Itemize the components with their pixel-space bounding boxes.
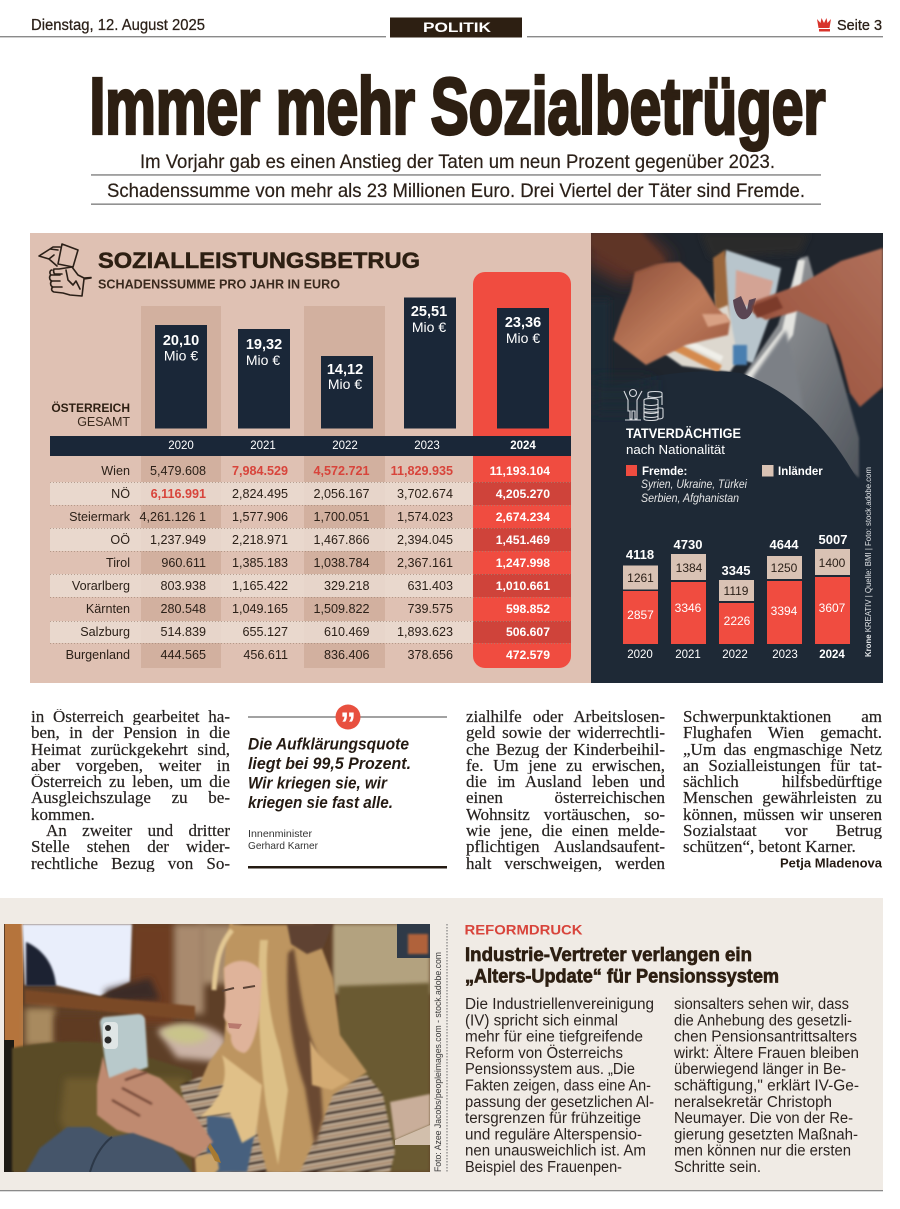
- quote attribution: Innenminister: [248, 828, 313, 840]
- stacked bar 2022: 3345: [722, 563, 750, 578]
- stacked bar 2023: [767, 537, 802, 661]
- article text column 1: Reform von Österreichs: [465, 1044, 623, 1062]
- stacked bar 2020: 2020: [627, 649, 653, 661]
- overalls: [207, 1115, 257, 1172]
- table row: Salzburg: 1,893.623: [397, 625, 453, 639]
- subheading: [91, 151, 821, 205]
- section label: [390, 18, 522, 38]
- table row: NÖ: [111, 487, 550, 501]
- table header: [50, 436, 571, 456]
- bar 2024: [497, 308, 549, 428]
- stacked bar 2023: 2023: [772, 649, 798, 661]
- table row: Burgenland: 836.406: [324, 648, 370, 662]
- icon: hand with money: [39, 244, 91, 296]
- table row: OÖ: 1,237.949: [150, 533, 206, 547]
- table row: Kärnten: [86, 602, 550, 616]
- article text column 1: Fakten zeigen, dass eine An-: [465, 1078, 651, 1094]
- article text column 2: [466, 709, 665, 872]
- bar 2021: Mio €: [246, 352, 280, 368]
- subheading: Im Vorjahr gab es einen Anstieg der Taten um neun Prozent gegenüber 2023.: [140, 151, 775, 173]
- bar 2022: [321, 356, 373, 428]
- page number: Seite 3: [837, 18, 882, 34]
- table row: Kärnten: 1,509.822: [313, 602, 370, 616]
- table row: Vorarlberg: Vorarlberg: [72, 579, 130, 593]
- table row: Tirol: [106, 556, 550, 570]
- stacked bar 2021: 3346: [675, 601, 702, 615]
- phone: [100, 1014, 148, 1084]
- stacked bar 2023: 4644: [770, 537, 799, 552]
- icon: quote mark: [336, 704, 360, 742]
- table row: Steiermark: 2,674.234: [496, 510, 550, 524]
- striped shirt: [180, 1075, 395, 1172]
- quote attribution: Gerhard Karner: [248, 840, 318, 852]
- quote text: liegt bei 99,5 Prozent.: [248, 755, 411, 773]
- stacked bar 2024: 2024: [819, 649, 845, 661]
- byline: Petja Mladenova: [780, 856, 883, 870]
- hands: [97, 1056, 213, 1158]
- table header: 2021: [250, 440, 276, 452]
- table header: 2022: [332, 440, 358, 452]
- bar 2020: [155, 325, 207, 428]
- stacked bar 2024: 1400: [819, 556, 846, 570]
- article text column 2: wirkt: Ältere Frauen bleiben: [673, 1045, 859, 1062]
- knees jeans: [25, 1127, 193, 1174]
- stacked bar 2023: 3394: [771, 604, 798, 618]
- table row: OÖ: [110, 533, 550, 547]
- stacked bar 2021: 1384: [676, 561, 703, 575]
- stacked bar 2020: 4118: [626, 547, 654, 562]
- table row: NÖ: 6,116.991: [151, 487, 206, 501]
- article headline: [465, 944, 779, 988]
- table row: NÖ: 3,702.674: [397, 487, 453, 501]
- table row: Wien: 7,984.529: [232, 464, 288, 478]
- left hand: [613, 262, 730, 365]
- legend: Inländer: [778, 466, 823, 478]
- table row: Wien: 5,479.608: [150, 464, 206, 478]
- article text column 1: und reguläre Alterspensio-: [465, 1126, 642, 1143]
- subheading: Schadenssumme von mehr als 23 Millionen Euro. Drei Viertel der Täter sind Fremde.: [107, 180, 805, 202]
- stacked bar 2021: 4730: [674, 537, 702, 552]
- table row: Steiermark: 1,577.906: [232, 510, 288, 524]
- table row: Kärnten: 739.575: [407, 602, 453, 616]
- dark curved overlay: [656, 371, 855, 476]
- article text column 2: die Anhebung des gesetzli-: [674, 1012, 852, 1029]
- row label heading: ÖSTERREICH: [51, 400, 130, 415]
- quote text: Wir kriegen sie, wir: [248, 774, 388, 792]
- bar 2021: [238, 329, 290, 428]
- table row: Kärnten: 598.852: [506, 602, 550, 616]
- bar 2020: 20,10: [163, 333, 199, 349]
- stacked bar 2020: [623, 547, 658, 661]
- quote attribution: [248, 828, 318, 852]
- hair: [197, 917, 367, 1172]
- article text column 3: [683, 709, 882, 856]
- bar 2023: 25,51: [411, 304, 447, 320]
- table row: Burgenland: 378.656: [407, 648, 453, 662]
- table row: Kärnten: 280.548: [160, 602, 206, 616]
- stacked bar 2024: 5007: [819, 532, 847, 547]
- table row: NÖ: 2,824.495: [232, 487, 288, 501]
- table row: Vorarlberg: 803.938: [160, 579, 206, 593]
- page header: [0, 17, 883, 38]
- bar 2023: Mio €: [412, 319, 446, 335]
- table row: Wien: 11,829.935: [391, 464, 453, 478]
- chart heading: SOZIALLEISTUNGSBETRUG: [98, 248, 420, 273]
- table header: 2020: [168, 440, 194, 452]
- table row: Salzburg: Salzburg: [80, 625, 130, 639]
- table row: Steiermark: [69, 510, 550, 524]
- article text column 2: neralsekretär Christoph: [674, 1094, 832, 1111]
- table row: Tirol: 1,385.183: [232, 556, 288, 570]
- table header: 2023: [414, 440, 440, 452]
- article text column 1: (IV) spricht sich einmal: [465, 1012, 618, 1029]
- column highlight 2022: [304, 306, 385, 668]
- table row: Salzburg: 514.839: [160, 625, 206, 639]
- article text column 2: schäftigung," erklärt IV-Ge-: [674, 1078, 859, 1094]
- table row: Vorarlberg: 329.218: [324, 579, 370, 593]
- quote text: Die Aufklärungsquote: [248, 736, 409, 754]
- icon: quote mark: ”: [340, 706, 356, 742]
- table row: Salzburg: 506.607: [506, 625, 550, 639]
- article text column 2: Schritte sein.: [674, 1159, 761, 1176]
- table row: Tirol: 1,247.998: [496, 556, 550, 570]
- table row: OÖ: 2,394.045: [397, 533, 453, 547]
- table row: NÖ: NÖ: [111, 487, 130, 501]
- pull quote: [248, 704, 447, 868]
- banknotes: [715, 250, 781, 363]
- table row: OÖ: OÖ: [110, 533, 130, 547]
- table row: Burgenland: 444.565: [160, 648, 206, 662]
- table row: Steiermark: 1,700.051: [313, 510, 370, 524]
- photo: woman looking at phone: [4, 917, 430, 1174]
- stacked bar 2022: 2022: [722, 649, 748, 661]
- row label heading: [51, 400, 130, 429]
- photo credit: Foto: Azee Jacobs/peopleimages.com - stock.adobe.com: [433, 952, 444, 1172]
- table row: OÖ: 2,218.971: [232, 533, 288, 547]
- table row: Steiermark: 4,261.126 1: [139, 510, 206, 524]
- table row: Burgenland: 456.611: [243, 648, 288, 662]
- column highlight 2020: [141, 306, 221, 668]
- article text column 1: tersgrenzen für frühzeitige: [465, 1110, 641, 1127]
- bar 2021: 19,32: [246, 337, 282, 353]
- article headline: „Alters-Update“ für Pensionssystem: [465, 966, 779, 988]
- panel: Sozialleistungsbetrug table and bars: [30, 233, 591, 683]
- table row: Salzburg: 655.127: [242, 625, 288, 639]
- table row: Salzburg: [80, 625, 550, 639]
- photo: hands with wallet and money: [591, 233, 883, 478]
- table row: Tirol: Tirol: [106, 556, 130, 570]
- table row: Wien: Wien: [101, 464, 130, 478]
- bar 2024: Mio €: [506, 330, 540, 346]
- table row: Burgenland: [66, 648, 550, 662]
- legend: [626, 465, 823, 505]
- panel: suspects by nationality: [585, 228, 883, 690]
- panel: Reformdruck: [0, 898, 883, 1191]
- stacked bar 2024: [815, 532, 850, 661]
- table row: Wien: 4,572.721: [313, 464, 370, 478]
- stacked bar 2023: 1250: [771, 561, 798, 575]
- table row: Kärnten: 1,049.165: [232, 602, 288, 616]
- article text column 2: chen Pensionsantrittsalters: [674, 1029, 857, 1046]
- zebra rows: [50, 482, 473, 643]
- quote text: [248, 736, 411, 812]
- table row: OÖ: 1,451.469: [496, 533, 550, 547]
- table row: Vorarlberg: [72, 579, 550, 593]
- table row: Tirol: 1,038.784: [313, 556, 370, 570]
- table row: Salzburg: 610.469: [324, 625, 370, 639]
- table header: 2024: [510, 440, 536, 452]
- table row: Burgenland: 472.579: [506, 648, 550, 662]
- table row: Vorarlberg: 1,010.661: [496, 579, 550, 593]
- article text column 2: [673, 996, 859, 1176]
- article text column 1: Die Industriellenvereinigung: [465, 996, 654, 1013]
- article text column 1: passung der gesetzlichen Al-: [465, 1094, 654, 1111]
- article text column 1: nen unausweichlich ist. Am: [465, 1143, 646, 1160]
- subheading: by nationality: nach Nationalität: [626, 442, 725, 457]
- table row: NÖ: 4,205.270: [496, 487, 550, 501]
- article text column 1: [465, 996, 654, 1176]
- heading: suspects: TATVERDÄCHTIGE: [626, 426, 741, 441]
- bar 2023: [404, 298, 456, 428]
- article text column 2: gierung gesetzten Maßnah-: [674, 1126, 858, 1143]
- icon: crown: [817, 18, 831, 32]
- stacked bar 2024: 3607: [819, 601, 846, 615]
- table row: Tirol: 960.611: [161, 556, 206, 570]
- table row: Wien: 11,193.104: [490, 464, 550, 478]
- face: [224, 961, 262, 1053]
- source credit: Krone KREATIV | Quelle: BMI | Foto: stock.adobe.com: [863, 467, 873, 657]
- stacked bar 2022: 1119: [724, 584, 749, 598]
- row label heading: GESAMT: [77, 415, 130, 429]
- stacked bar 2022: 2226: [724, 614, 751, 628]
- table row: Burgenland: Burgenland: [66, 648, 130, 662]
- table row: Kärnten: Kärnten: [86, 602, 130, 616]
- stacked bar 2020: 2857: [627, 608, 654, 622]
- article text column 1: mehr für eine tiefgreifende: [465, 1029, 643, 1046]
- wallet: [744, 256, 859, 478]
- table row: Steiermark: Steiermark: [69, 510, 131, 524]
- table row: Wien: [101, 464, 550, 478]
- article text column 1: [31, 709, 230, 872]
- bar 2020: Mio €: [164, 348, 198, 364]
- column highlight 2024: [473, 272, 571, 668]
- article text column 1: Pensionssystem aus. „Die: [465, 1061, 635, 1078]
- stacked bar 2022: [719, 563, 754, 661]
- stacked bar 2021: 2021: [675, 649, 701, 661]
- table row: Vorarlberg: 631.403: [407, 579, 453, 593]
- stacked bar 2020: 1261: [627, 571, 654, 585]
- article text column 2: überwiegend länger in Be-: [674, 1061, 846, 1078]
- table row: Vorarlberg: 1,165.422: [232, 579, 288, 593]
- stacked bar 2021: [671, 537, 706, 661]
- table row: NÖ: 2,056.167: [313, 487, 370, 501]
- bar 2022: Mio €: [328, 376, 362, 392]
- kicker: REFORMDRUCK: [464, 922, 582, 938]
- article headline: Industrie-Vertreter verlangen ein: [465, 944, 752, 966]
- right hand: [752, 248, 883, 407]
- article text column 1: Beispiel des Frauenpen-: [465, 1159, 622, 1176]
- chart subheading: SCHADENSSUMME PRO JAHR IN EURO: [98, 278, 340, 292]
- bar 2024: 23,36: [505, 315, 541, 331]
- article text column 2: sionsalters sehen wir, dass: [674, 996, 849, 1013]
- section label: POLITIK: [423, 20, 491, 35]
- article text column 2: Neumayer. Die von der Re-: [674, 1110, 853, 1127]
- table row: Tirol: 2,367.161: [397, 556, 453, 570]
- watch: [195, 1153, 219, 1174]
- date: Dienstag, 12. August 2025: [31, 17, 205, 34]
- table row: Steiermark: 1,574.023: [397, 510, 453, 524]
- legend: Serbien, Afghanistan: [641, 493, 739, 505]
- icon: person and coin stacks: [624, 390, 663, 420]
- quote text: kriegen sie fast alle.: [248, 794, 393, 812]
- article text column 2: men können nur die ersten: [674, 1143, 851, 1160]
- legend: Syrien, Ukraine, Türkei: [641, 479, 747, 491]
- legend: Fremde:: [642, 466, 687, 478]
- bar 2022: 14,12: [327, 362, 363, 378]
- table row: OÖ: 1,467.866: [313, 533, 370, 547]
